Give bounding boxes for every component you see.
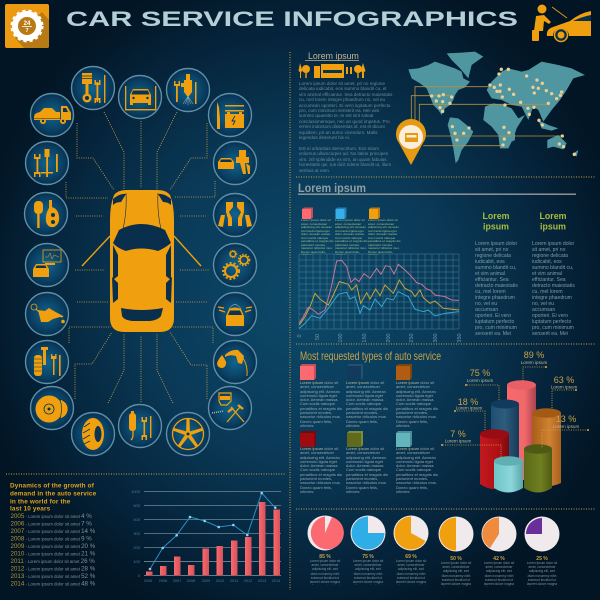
text block: right column: summo blandit cu, bbox=[532, 265, 573, 271]
text block: left column: integre phaedrum bbox=[475, 295, 515, 301]
text block: right column: Lorem ipsum dolor bbox=[532, 241, 574, 247]
service type: teal: amet, consectetuer bbox=[396, 450, 430, 455]
pie: 75%: Lorem ipsum dolor sit bbox=[353, 559, 383, 563]
service type: pink: adipiscing elit. Aenean bbox=[300, 389, 340, 394]
service type: olive: nascetur ridiculus mus. bbox=[346, 480, 387, 485]
legend: pink: nascetur ridiculus mus. bbox=[301, 246, 333, 250]
pie: 85% bbox=[305, 516, 345, 585]
text block: right column: senserit ea. Mei bbox=[532, 331, 568, 337]
service type: brown: Cum sociis natoque bbox=[396, 401, 431, 406]
service type: navy: penatibus et magnis dis bbox=[346, 406, 388, 411]
legend: orange: dolor. Aenean massa. bbox=[368, 232, 398, 236]
legend: blue: Cum sociis natoque bbox=[335, 236, 362, 240]
3D cylinder chart: Lorem ipsum bbox=[521, 360, 547, 365]
legend: pink: adipiscing elit. Aenean bbox=[301, 225, 332, 229]
legend: orange: commodo ligula eget bbox=[368, 228, 397, 232]
service type: navy: dolor. Aenean massa. bbox=[346, 397, 384, 402]
service type: brown: dolor. Aenean massa. bbox=[396, 397, 434, 402]
cylinder: 89% bbox=[507, 380, 536, 480]
pie: 50%: 50 % bbox=[450, 556, 462, 562]
legend: pink bbox=[301, 208, 337, 255]
heading: map section: Lorem ipsum bbox=[308, 51, 359, 61]
cylinder: 7% bbox=[494, 456, 523, 492]
pie: 75% bbox=[348, 516, 388, 585]
service type: brown: penatibus et magnis dis bbox=[396, 406, 438, 411]
pie: 85%: diam nonummy nibh bbox=[311, 572, 339, 576]
value labels: 75 % bbox=[470, 368, 490, 378]
text block: map description: vim animal efficiantur. Sea detracto maiestatis bbox=[299, 92, 392, 97]
icon: welding bbox=[208, 386, 252, 430]
value labels: 18 % bbox=[458, 397, 478, 407]
service type: pink: Donec quam felis, bbox=[300, 419, 332, 424]
bar and line chart: 1000 bbox=[131, 489, 141, 494]
legend: orange: Cum sociis natoque bbox=[368, 236, 395, 240]
text block: map description: errem indoctum dissentias id, est et dicunt bbox=[299, 124, 385, 129]
pie: 50%: euismod tincidunt ut bbox=[442, 578, 470, 582]
logo: 24/7 gear badge: 24 bbox=[24, 21, 31, 27]
legend: pink: commodo ligula eget bbox=[301, 228, 330, 232]
legend: blue: nascetur ridiculus mus. bbox=[335, 246, 367, 250]
icon: car repaint bbox=[214, 292, 256, 336]
icon: service station illustration bbox=[298, 63, 366, 78]
text block: right column: iudicabit, eos bbox=[532, 259, 562, 265]
service type: brown: amet, consectetuer bbox=[396, 384, 430, 389]
yearly growth list: 2009 - Lorem ipsum dolor sit amet 20 % bbox=[10, 543, 96, 550]
legend: blue: dolor. Aenean massa. bbox=[335, 232, 365, 236]
line chart bbox=[297, 254, 463, 343]
line chart: 100 bbox=[338, 333, 344, 343]
text block: right column: accumsan bbox=[532, 307, 555, 313]
pie: 25%: laoreet dolore magna bbox=[527, 582, 557, 586]
pie: 42%: Lorem ipsum dolor sit bbox=[484, 561, 514, 565]
cylinder: 18% bbox=[480, 429, 509, 489]
service type: pink: penatibus et magnis dis bbox=[300, 406, 342, 411]
yearly growth list: 2005 - Lorem ipsum dolor sit amet 4 % bbox=[10, 513, 92, 520]
service type: teal: Cum sociis natoque bbox=[396, 467, 431, 472]
legend: blue: amet, consectetuer bbox=[335, 222, 361, 226]
pie: 85%: euismod tincidunt ut bbox=[311, 576, 339, 580]
map location pins bbox=[430, 68, 576, 156]
text block: left column: regione delicata bbox=[475, 253, 511, 259]
pie: 85%: Lorem ipsum dolor sit bbox=[310, 559, 340, 563]
pie: 69%: diam nonummy nibh bbox=[397, 572, 425, 576]
value labels: 89 % bbox=[524, 350, 544, 360]
text block: left column: et vim animal bbox=[475, 271, 505, 277]
yearly growth list: 2013 - Lorem ipsum dolor sit amet 52 % bbox=[10, 573, 96, 580]
service type: navy: parturient montes, bbox=[346, 410, 378, 415]
legend: blue: penatibus et magnis dis bbox=[335, 239, 368, 243]
heading: dynamics of growth: last 10 years bbox=[10, 506, 51, 512]
value labels bbox=[450, 350, 576, 439]
service type: brown: nascetur ridiculus mus. bbox=[396, 414, 437, 419]
legend: orange: adipiscing elit. Aenean bbox=[368, 225, 399, 229]
legend: blue bbox=[335, 208, 371, 255]
pie: 69%: euismod tincidunt ut bbox=[397, 576, 425, 580]
legend: orange: nascetur ridiculus mus. bbox=[368, 246, 400, 250]
service type: red: dolor. Aenean massa. bbox=[300, 463, 338, 468]
service type: red: adipiscing elit. Aenean bbox=[300, 455, 340, 460]
service type: teal: commodo ligula eget bbox=[396, 459, 433, 464]
service type: olive: dolor. Aenean massa. bbox=[346, 463, 384, 468]
text block: left column: cu, mel lorem bbox=[475, 289, 506, 295]
line chart: 200 bbox=[386, 333, 392, 343]
text block: map description: equidem, pri an sumo vivendum. Malis bbox=[299, 130, 377, 135]
callout pin: service location bbox=[396, 119, 426, 165]
text block: map description: legendos deserunt his ei. bbox=[299, 135, 350, 140]
3D cylinder chart: Lorem ipsum bbox=[467, 378, 493, 383]
pie: 42%: amet, consectetuer bbox=[485, 565, 513, 569]
service type: olive: penatibus et magnis dis bbox=[346, 472, 388, 477]
pie: 75%: euismod tincidunt ut bbox=[354, 576, 382, 580]
icon: shock and tyre bbox=[26, 340, 68, 384]
service type: brown: adipiscing elit. Aenean bbox=[396, 389, 436, 394]
text block: right column: integre phaedrum bbox=[532, 295, 572, 301]
legend: orange: amet, consectetuer bbox=[368, 222, 394, 226]
service type: navy: nascetur ridiculus mus. bbox=[346, 414, 387, 419]
text block: right column: regione delicata bbox=[532, 253, 568, 259]
service type: red: amet, consectetuer bbox=[300, 450, 334, 455]
text block: map description: Lorem ipsum dolor sit amet, pri no regione bbox=[299, 81, 385, 86]
text block: right column: sit amet, pri no bbox=[532, 247, 565, 253]
service type: teal: adipiscing elit. Aenean bbox=[396, 455, 436, 460]
pie: 42%: adipiscing elit, sed bbox=[486, 569, 512, 573]
icon: diagnostics monitor bbox=[26, 244, 68, 286]
text block: left column bbox=[475, 241, 525, 337]
legend: blue: adipiscing elit. Aenean bbox=[335, 225, 366, 229]
column heading: left: Lorem bbox=[483, 211, 509, 221]
service type: pink: Cum sociis natoque bbox=[300, 401, 335, 406]
pie: 69%: amet, consectetuer bbox=[397, 563, 425, 567]
icon: piston and tools bbox=[72, 66, 114, 110]
yearly growth list bbox=[10, 513, 96, 588]
pie: 25%: amet, consectetuer bbox=[528, 565, 556, 569]
icon: tyre bbox=[72, 412, 114, 456]
legend: pink: amet, consectetuer bbox=[301, 222, 327, 226]
text block: map description: vim, zril splendide ex vim, an quam fabulas bbox=[299, 157, 387, 162]
legend: pink: parturient montes, bbox=[301, 242, 326, 246]
pie: 25%: 25 % bbox=[536, 556, 548, 562]
service type: navy bbox=[346, 364, 392, 427]
column heading: right: Lorem bbox=[540, 211, 566, 221]
pie: 85%: amet, consectetuer bbox=[311, 563, 339, 567]
text block: map description: delicata iudicabit, eos summo blandit cu, et bbox=[299, 86, 387, 91]
bar and line chart: 2007 bbox=[173, 579, 181, 583]
pie: 50% bbox=[436, 516, 476, 587]
pie: 75%: adipiscing elit, sed bbox=[355, 567, 381, 571]
service type: pink: commodo ligula eget bbox=[300, 393, 337, 398]
icon: suspension wheels bbox=[214, 194, 256, 236]
service type: olive: Donec quam felis, bbox=[346, 485, 378, 490]
line chart: 50 bbox=[315, 334, 321, 340]
service type: pink: dolor. Aenean massa. bbox=[300, 397, 338, 402]
icon: battery and tools bbox=[208, 94, 252, 136]
pie: 85%: adipiscing elit, sed bbox=[312, 567, 338, 571]
icon: gears bbox=[214, 244, 256, 286]
text block: map description: volumus ullamcorper ad. No latine principes bbox=[299, 151, 388, 156]
bar and line chart: 2013 bbox=[258, 579, 266, 583]
bar and line chart: 2009 bbox=[202, 579, 210, 583]
yearly growth list: 2011 - Lorem ipsum dolor sit amet 26 % bbox=[10, 558, 95, 565]
bar and line chart: 2010 bbox=[216, 579, 224, 583]
text block: right column: detracto maiestatis bbox=[532, 283, 575, 289]
pie charts bbox=[305, 516, 562, 587]
service icons ring bbox=[24, 66, 256, 456]
legend: orange: penatibus et magnis dis bbox=[368, 239, 401, 243]
legend: orange: Donec quam felis, bbox=[368, 250, 393, 254]
pie: 50%: laoreet dolore magna bbox=[441, 582, 471, 586]
pie: 69% bbox=[391, 516, 431, 585]
icon: paint gun and car bbox=[214, 142, 256, 184]
legend: orange bbox=[368, 208, 404, 255]
cylinder: 13% bbox=[524, 444, 552, 492]
title: CAR SERVICE INFOGRAPHICS bbox=[66, 8, 518, 31]
yearly growth list: 2008 - Lorem ipsum dolor sit amet 9 % bbox=[10, 536, 92, 543]
service type: teal: Donec quam felis, bbox=[396, 485, 428, 490]
text block: right column bbox=[532, 241, 582, 337]
service type: brown: parturient montes, bbox=[396, 410, 428, 415]
bar and line chart: 200 bbox=[133, 545, 141, 550]
text block: left column: senserit ea. Mei bbox=[475, 331, 511, 337]
heading: dynamics of growth: demand in the auto service bbox=[10, 490, 97, 498]
icon: tow truck bbox=[30, 94, 74, 136]
text block: map description: accumsan oporteri. Ei vero luptatum perfecto bbox=[299, 103, 390, 108]
line chart: 150 bbox=[362, 333, 368, 343]
bar and line chart: 2011 bbox=[230, 579, 238, 583]
cylinder: 75% bbox=[491, 400, 519, 480]
text block: right column: no, vel eu bbox=[532, 301, 554, 307]
text block: map description: conclusionemque, nec an quod impetus. Pro bbox=[299, 119, 390, 124]
service type: pink bbox=[300, 364, 346, 427]
service type: red bbox=[300, 431, 346, 493]
pie: 75%: diam nonummy nibh bbox=[354, 572, 382, 576]
service type: olive bbox=[346, 431, 392, 493]
3D cylinder chart: Lorem ipsum bbox=[445, 438, 471, 444]
service type: teal bbox=[396, 431, 442, 493]
text block: map description: Est ei urbanitas democritum. Eos etiam bbox=[299, 146, 379, 151]
service type: pink: nascetur ridiculus mus. bbox=[300, 414, 341, 419]
pie: 42%: euismod tincidunt ut bbox=[485, 578, 513, 582]
text block: left column: no, vel eu bbox=[475, 301, 497, 307]
bar and line chart bbox=[131, 489, 281, 583]
legend: pink: penatibus et magnis dis bbox=[301, 239, 334, 243]
connector lines from car to icons bbox=[66, 112, 215, 403]
column heading: right: ipsum bbox=[540, 221, 566, 231]
pie: 42%: diam nonummy nibh bbox=[485, 574, 513, 578]
pie: 25%: adipiscing elit, sed bbox=[529, 569, 555, 573]
pie: 69%: Lorem ipsum dolor sit bbox=[396, 559, 426, 563]
text block: right column: oporteri. Ei vero bbox=[532, 313, 568, 319]
icon: car lift bbox=[118, 76, 162, 118]
text block: left column: oporteri. Ei vero bbox=[475, 313, 511, 319]
cylinder: 63% bbox=[532, 408, 561, 486]
yearly growth list: 2006 - Lorem ipsum dolor sit amet 7 % bbox=[10, 521, 92, 528]
legend: blue: parturient montes, bbox=[335, 242, 360, 246]
legend: orange: parturient montes, bbox=[368, 242, 393, 246]
bar and line chart: 2005 bbox=[144, 579, 152, 583]
pie: 75%: amet, consectetuer bbox=[354, 563, 382, 567]
line chart: 300 bbox=[433, 333, 439, 343]
pie: 69%: 69 % bbox=[405, 554, 417, 560]
text block: left column: accumsan bbox=[475, 307, 498, 313]
pie: 25%: diam nonummy nibh bbox=[528, 574, 556, 578]
pie: 69%: adipiscing elit, sed bbox=[398, 567, 424, 571]
service type: olive: commodo ligula eget bbox=[346, 459, 383, 464]
text block: left column: sit amet, pri no bbox=[475, 247, 508, 253]
text block: map description: cu, mel lorem integre phaedrum no, vel eu bbox=[299, 97, 385, 102]
world map bbox=[408, 52, 585, 163]
icon: fuel injector bbox=[166, 68, 210, 112]
value labels: 13 % bbox=[556, 414, 576, 424]
service type: brown bbox=[396, 364, 442, 427]
pie: 75%: laoreet dolore magna bbox=[353, 580, 383, 584]
bar and line chart: 300 bbox=[133, 531, 141, 536]
legend: blue: Donec quam felis, bbox=[335, 250, 360, 254]
pie: 50%: amet, consectetuer bbox=[442, 565, 470, 569]
icon: suspension tools bbox=[26, 142, 68, 184]
service type: red: parturient montes, bbox=[300, 476, 332, 481]
text block: map description: summo quaestio te, te est sint soleat bbox=[299, 113, 374, 118]
3D cylinder chart: Lorem ipsum bbox=[551, 384, 577, 390]
icon: oil can bbox=[26, 292, 68, 336]
service type: olive: Cum sociis natoque bbox=[346, 467, 381, 472]
yearly growth list: 2007 - Lorem ipsum dolor sit amet 14 % bbox=[10, 528, 96, 535]
logo: 24/7 gear badge bbox=[5, 4, 49, 48]
line chart: 0 bbox=[297, 334, 303, 338]
heading: most requested: Most requested types of auto service bbox=[300, 349, 441, 363]
text block: left column: iudicabit, eos bbox=[475, 259, 505, 265]
service type: red: penatibus et magnis dis bbox=[300, 472, 342, 477]
legend: pink: Cum sociis natoque bbox=[301, 236, 328, 240]
pie: 25%: Lorem ipsum dolor sit bbox=[527, 561, 557, 565]
logo: 24/7 gear badge: 7 bbox=[25, 28, 29, 34]
icon: exhaust and tools bbox=[118, 404, 162, 448]
pie: 69%: laoreet dolore magna bbox=[396, 580, 426, 584]
pie: 85%: 85 % bbox=[319, 554, 331, 560]
pie: 42%: laoreet dolore magna bbox=[484, 582, 514, 586]
service type: red: nascetur ridiculus mus. bbox=[300, 480, 341, 485]
yearly growth list: 2014 - Lorem ipsum dolor sit amet 48 % bbox=[10, 581, 96, 588]
service type: teal: nascetur ridiculus mus. bbox=[396, 480, 437, 485]
service type: red: Donec quam felis, bbox=[300, 485, 332, 490]
pie: 42% bbox=[479, 516, 519, 587]
line chart: 350 bbox=[457, 333, 463, 343]
legend: blue: commodo ligula eget bbox=[335, 228, 364, 232]
text block: map description bbox=[299, 81, 399, 176]
text block: left column: efficiantur. Sea bbox=[475, 277, 509, 283]
pie: 85%: laoreet dolore magna bbox=[310, 580, 340, 584]
vertical divider bbox=[289, 52, 291, 590]
bar and line chart: 100 bbox=[133, 559, 141, 564]
3D cylinder chart: Lorem ipsum bbox=[456, 406, 482, 410]
value labels: 7 % bbox=[450, 429, 466, 439]
text block: right column: cu, mel lorem bbox=[532, 289, 563, 295]
heading: dynamics of growth: in the world for the bbox=[10, 498, 71, 506]
bar and line chart: 500 bbox=[133, 503, 141, 508]
icon: mechanic at car bbox=[532, 4, 591, 42]
value labels: 63 % bbox=[554, 375, 574, 385]
service type: teal: parturient montes, bbox=[396, 476, 428, 481]
column heading: left: ipsum bbox=[483, 221, 509, 231]
bar and line chart: 2014 bbox=[272, 579, 280, 583]
text block: map description: ventius at eam. bbox=[299, 168, 330, 172]
pie: 50%: Lorem ipsum dolor sit bbox=[441, 561, 471, 565]
text block: right column: efficiantur. Sea bbox=[532, 277, 566, 283]
pie: 50%: adipiscing elit, sed bbox=[443, 569, 469, 573]
service type: olive: amet, consectetuer bbox=[346, 450, 380, 455]
bar and line chart: 400 bbox=[133, 517, 141, 522]
text block: right column: pro, cum minimum bbox=[532, 325, 574, 331]
service type: olive: parturient montes, bbox=[346, 476, 378, 481]
bar and line chart: 2012 bbox=[244, 579, 252, 583]
bar and line chart: 2008 bbox=[187, 579, 195, 583]
service type: navy: adipiscing elit. Aenean bbox=[346, 389, 386, 394]
text block: left column: luptatum perfecto bbox=[475, 319, 514, 325]
icon: brake disc bbox=[30, 386, 74, 430]
heading: dynamics of growth: Dynamics of the growth of bbox=[10, 482, 95, 490]
service type: pink: parturient montes, bbox=[300, 410, 332, 415]
bar and line chart: 0 bbox=[138, 573, 141, 578]
service type: red: commodo ligula eget bbox=[300, 459, 337, 464]
pie: 42%: 42 % bbox=[493, 556, 505, 562]
cylinder leader lines bbox=[442, 367, 588, 459]
service type: teal: penatibus et magnis dis bbox=[396, 472, 438, 477]
pie: 25% bbox=[522, 516, 562, 587]
service type: red: Cum sociis natoque bbox=[300, 467, 335, 472]
pie: 75%: 75 % bbox=[362, 554, 374, 560]
yearly growth list: 2010 - Lorem ipsum dolor sit amet 21 % bbox=[10, 551, 96, 558]
legend: six service types bbox=[300, 364, 442, 493]
service type: navy: amet, consectetuer bbox=[346, 384, 380, 389]
heading: chart section: Lorem ipsum bbox=[298, 183, 366, 195]
service type: navy: Donec quam felis, bbox=[346, 419, 378, 424]
text block: right column: luptatum perfecto bbox=[532, 319, 571, 325]
3D cylinder chart: Lorem ipsum bbox=[553, 424, 579, 429]
text block: left column: summo blandit cu, bbox=[475, 265, 516, 271]
line chart: 250 bbox=[409, 333, 415, 343]
service type: teal: dolor. Aenean massa. bbox=[396, 463, 434, 468]
service type: olive: adipiscing elit. Aenean bbox=[346, 455, 386, 460]
pie: 25%: euismod tincidunt ut bbox=[528, 578, 556, 582]
service type: brown: commodo ligula eget bbox=[396, 393, 433, 398]
service type: pink: amet, consectetuer bbox=[300, 384, 334, 389]
icon: car keys bbox=[24, 192, 68, 236]
icon: alloy wheel bbox=[166, 412, 210, 456]
heading: dynamics of growth bbox=[10, 482, 97, 512]
text block: map description: pro, cum minimum senserit ea. Mei wisi bbox=[299, 108, 379, 113]
text block: left column: detracto maiestatis bbox=[475, 283, 518, 289]
text block: map description: honestatis qui. Ius dicit ridens blandit ut, illum bbox=[299, 162, 391, 167]
service type: navy: Cum sociis natoque bbox=[346, 401, 381, 406]
yearly growth list: 2012 - Lorem ipsum dolor sit amet 28 % bbox=[10, 566, 96, 573]
icon: fuel nozzle bbox=[214, 340, 256, 384]
service type: brown: Donec quam felis, bbox=[396, 419, 428, 424]
pie: 50%: diam nonummy nibh bbox=[442, 574, 470, 578]
service type: navy: commodo ligula eget bbox=[346, 393, 383, 398]
legend: pink: dolor. Aenean massa. bbox=[301, 232, 331, 236]
text block: left column: Lorem ipsum dolor bbox=[475, 241, 517, 247]
3D cylinder chart bbox=[441, 350, 589, 492]
map connector lines bbox=[411, 87, 562, 146]
bar and line chart: 2006 bbox=[159, 579, 167, 583]
car top view bbox=[82, 190, 201, 332]
text block: right column: et vim animal bbox=[532, 271, 562, 277]
legend: pink: Donec quam felis, bbox=[301, 250, 326, 254]
text block: left column: pro, cum minimum bbox=[475, 325, 517, 331]
